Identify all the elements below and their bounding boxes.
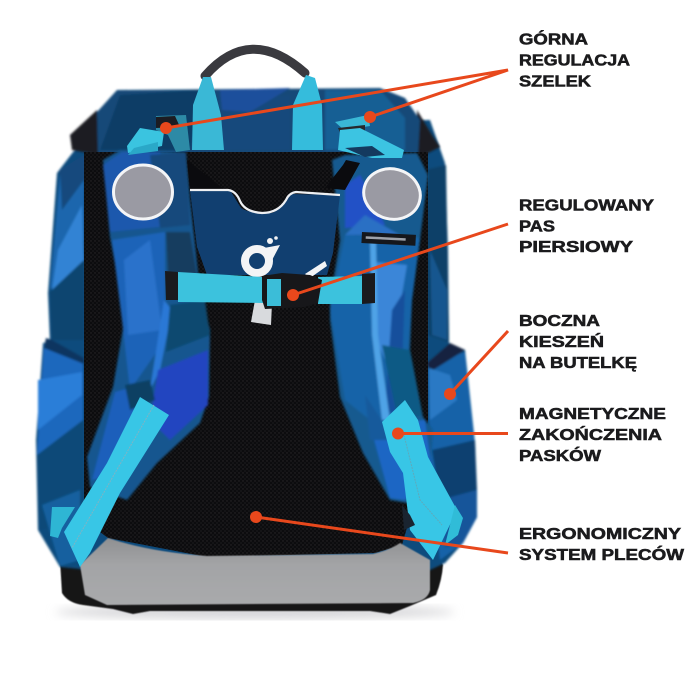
grey reflective bottom panel bbox=[80, 538, 430, 605]
left shoulder strap bbox=[87, 150, 210, 500]
callout: boczna kieszeń na butelkę: KIESZEŃ bbox=[519, 334, 604, 351]
top strap adjusters bbox=[127, 115, 404, 158]
handle webbing bbox=[192, 77, 224, 150]
callout: magnetyczne zakończenia pasków bbox=[392, 406, 666, 465]
magnetic tab left bbox=[50, 397, 169, 567]
callout: regulowany pas piersiowy: REGULOWANY bbox=[519, 198, 655, 214]
white trim line bbox=[190, 190, 340, 213]
callout: magnetyczne zakończenia pasków: ZAKOŃCZENIA bbox=[519, 427, 662, 444]
label: SZELEK bbox=[519, 74, 592, 90]
callout: boczna kieszeń na butelkę: NA BUTELKĘ bbox=[519, 355, 637, 372]
left pocket bbox=[37, 344, 83, 470]
callout: boczna kieszeń na butelkę: BOCZNA bbox=[519, 313, 600, 330]
centre padded panel bbox=[187, 160, 360, 325]
handle bbox=[192, 49, 323, 150]
label bbox=[519, 30, 630, 90]
ground shadow bbox=[55, 605, 455, 619]
reflective circle left bbox=[114, 165, 172, 219]
callout: boczna kieszeń na butelkę bbox=[444, 313, 637, 400]
callout: magnetyczne zakończenia pasków: MAGNETYCZNE bbox=[519, 406, 666, 423]
chest strap with buckle bbox=[165, 271, 375, 309]
small label tag bbox=[251, 300, 272, 325]
side body left and right bbox=[36, 120, 477, 570]
top lid bbox=[70, 88, 440, 158]
lid black corners bbox=[70, 110, 440, 158]
callout: regulowany pas piersiowy: PAS bbox=[519, 218, 555, 236]
back mesh panel bbox=[84, 152, 428, 557]
reflective circle right bbox=[358, 162, 426, 226]
callout: ergonomiczny system pleców: SYSTEM PLECÓW bbox=[519, 546, 684, 564]
backpack photo bbox=[36, 49, 477, 619]
right pocket bbox=[428, 352, 477, 560]
magnetic tab right bbox=[382, 400, 463, 560]
callout: regulowany pas piersiowy bbox=[287, 198, 655, 301]
callout: magnetyczne zakończenia pasków: PASKÓW bbox=[519, 447, 601, 465]
dot right adjuster bbox=[364, 111, 376, 123]
callout: ergonomiczny system pleców bbox=[250, 511, 684, 564]
label: GÓRNA bbox=[519, 30, 588, 48]
label: REGULACJA bbox=[519, 52, 630, 70]
callout: górna regulacja szelek bbox=[160, 30, 630, 134]
dot left adjuster bbox=[160, 122, 172, 134]
dark wedges bbox=[187, 160, 360, 190]
white logo bbox=[245, 236, 280, 273]
left side facets bbox=[50, 175, 84, 290]
callout: regulowany pas piersiowy: PIERSIOWY bbox=[519, 239, 634, 256]
callout: ergonomiczny system pleców: ERGONOMICZNY bbox=[519, 526, 682, 543]
leader lines bbox=[166, 70, 508, 128]
right side facets bbox=[425, 165, 449, 342]
right shoulder strap bbox=[330, 153, 433, 503]
black base bbox=[60, 540, 443, 614]
product tag bbox=[361, 232, 416, 246]
